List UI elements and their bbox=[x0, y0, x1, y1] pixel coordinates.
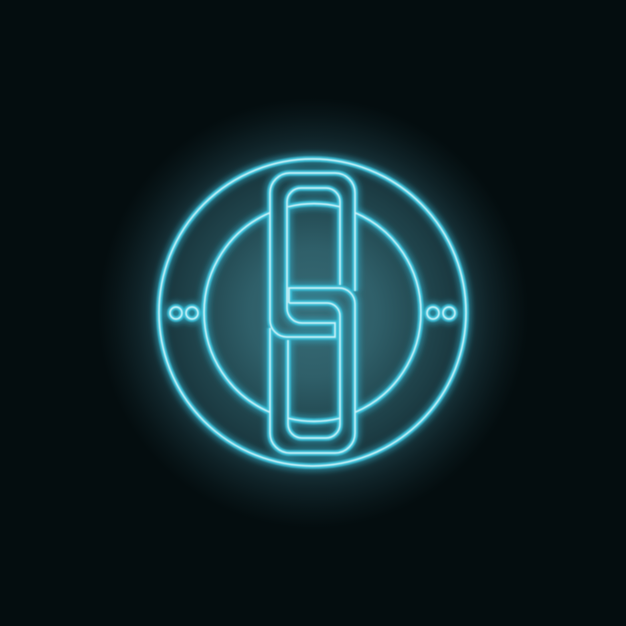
neon bright core bbox=[159, 159, 466, 466]
background glow bbox=[98, 98, 528, 528]
neon glow layer bbox=[159, 159, 466, 466]
neon tube layer bbox=[159, 159, 466, 466]
